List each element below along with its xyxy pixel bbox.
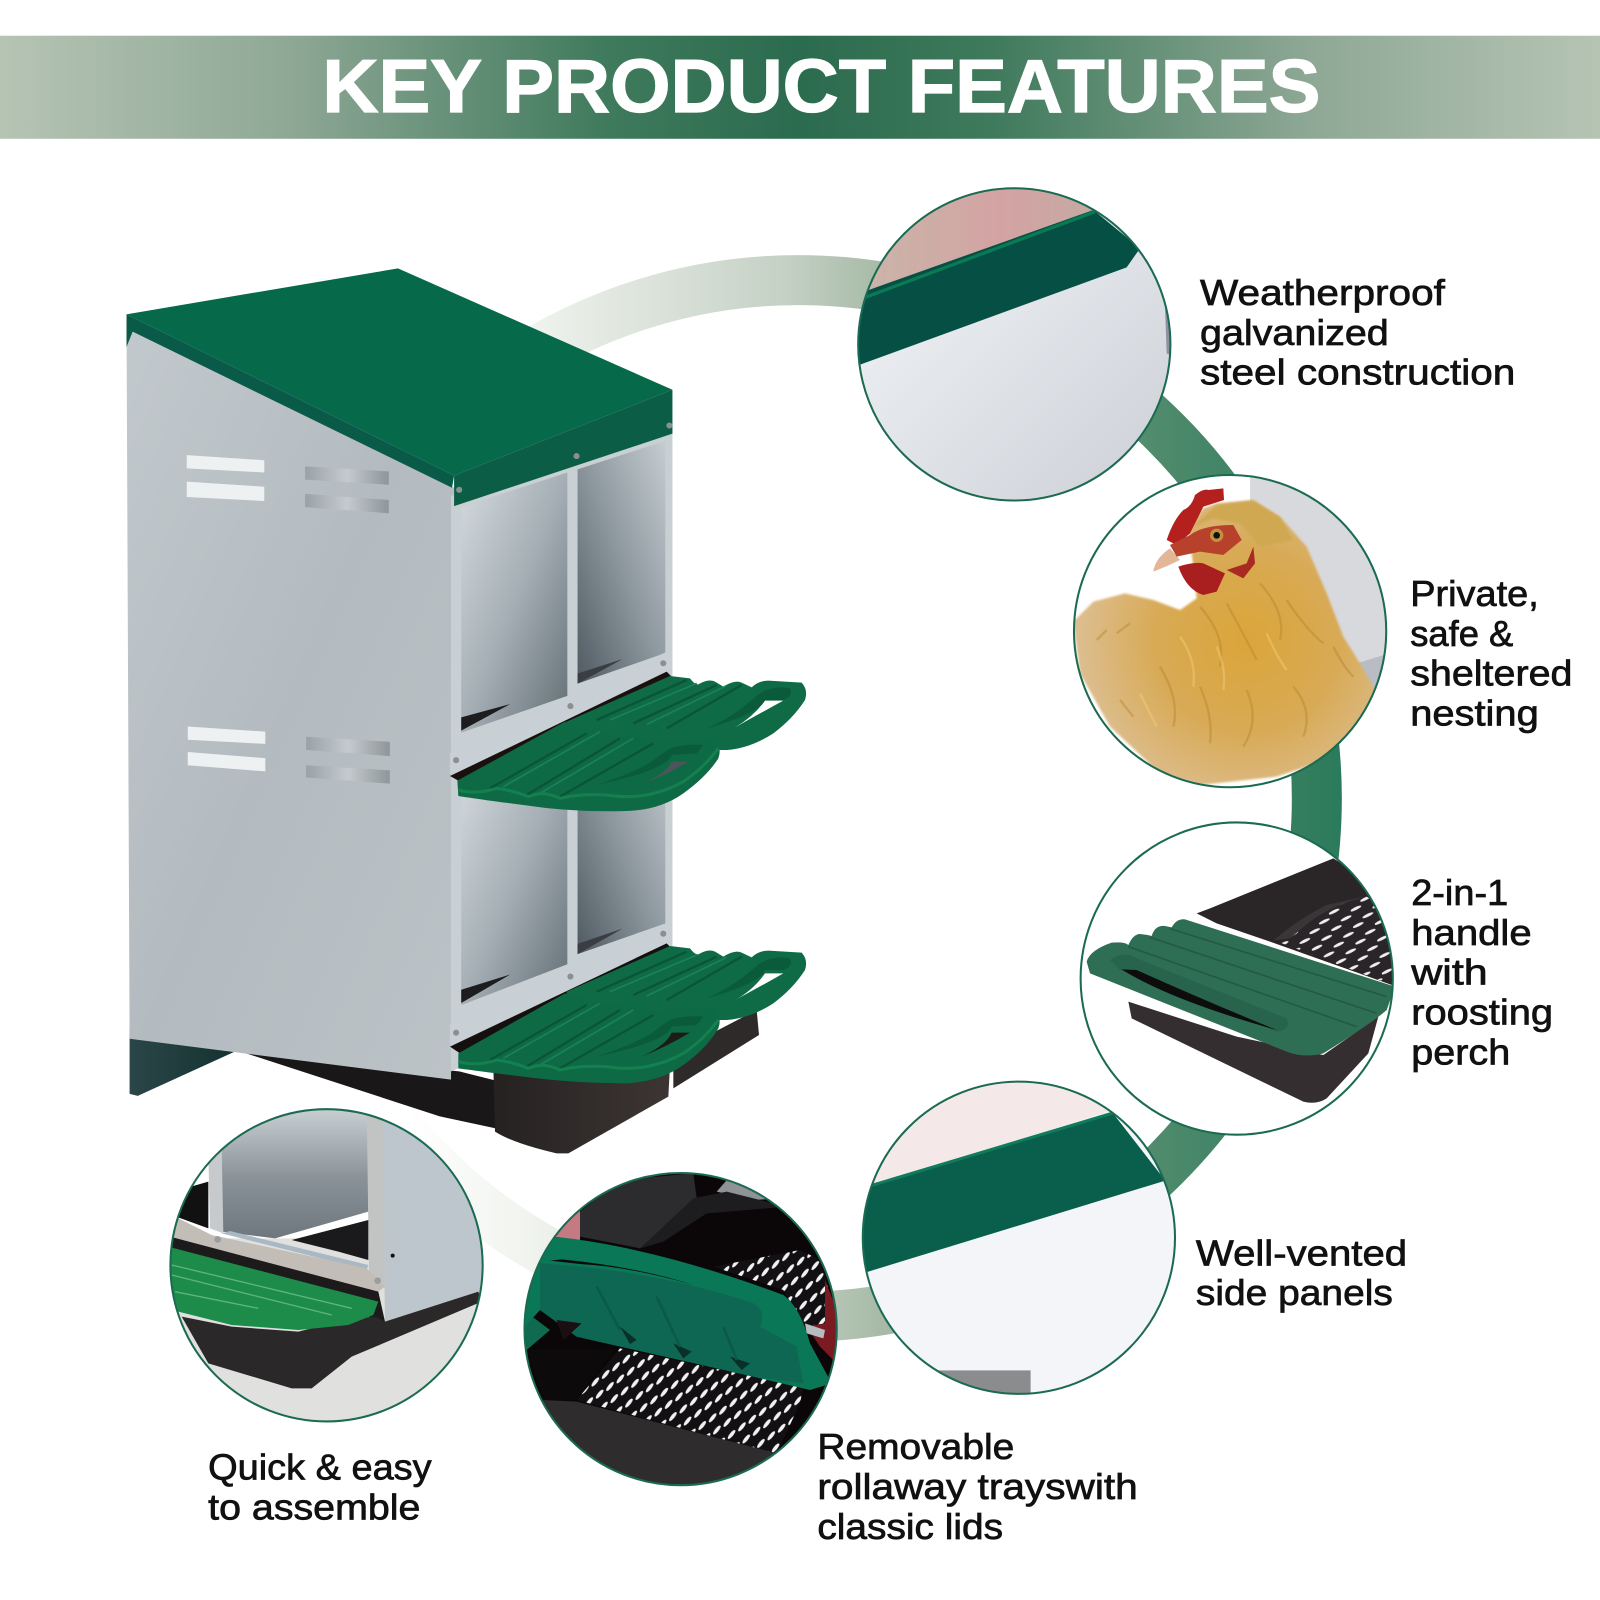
dark foot bbox=[130, 1026, 245, 1096]
photo circle: assembly bbox=[165, 1105, 498, 1426]
tray floor bbox=[233, 1049, 500, 1129]
label: weatherproof: galvanized bbox=[1200, 313, 1389, 353]
label: weatherproof bbox=[1200, 273, 1515, 393]
label: weatherproof: Weatherproof bbox=[1200, 273, 1445, 313]
nest compartments bbox=[450, 423, 672, 1071]
photo circle: handle with perch bbox=[1080, 822, 1397, 1139]
product: nesting box bbox=[127, 268, 806, 1153]
vent slots bbox=[187, 455, 390, 784]
lower tier trays and lids bbox=[450, 943, 806, 1153]
label: handle bbox=[1410, 873, 1553, 1072]
label: vented: Well-vented bbox=[1196, 1233, 1407, 1273]
label: handle: perch bbox=[1411, 1032, 1510, 1072]
upper tier lids bbox=[450, 672, 806, 811]
label: weatherproof: steel construction bbox=[1200, 353, 1515, 393]
header banner bbox=[0, 36, 1600, 139]
label: nesting: nesting bbox=[1410, 694, 1539, 734]
photo circle: vented side panel bbox=[862, 1082, 1179, 1398]
label: handle: roosting bbox=[1411, 992, 1553, 1032]
label: assembly: Quick & easy bbox=[208, 1448, 432, 1488]
label: assembly bbox=[208, 1448, 432, 1527]
connecting ring bbox=[280, 280, 1317, 1317]
label: removable trays: rollaway trayswith bbox=[817, 1467, 1138, 1507]
side panel bbox=[127, 324, 454, 1080]
label: nesting: safe & bbox=[1410, 614, 1513, 654]
photo circle: removable tray bbox=[515, 1163, 847, 1495]
label: assembly: to assemble bbox=[208, 1487, 420, 1527]
label: nesting: sheltered bbox=[1410, 654, 1572, 694]
label: handle: handle bbox=[1411, 913, 1532, 953]
label: nesting: Private, bbox=[1410, 574, 1539, 614]
label: vented: side panels bbox=[1196, 1273, 1393, 1313]
photo circle: galvanized steel bbox=[857, 187, 1172, 502]
label: nesting bbox=[1410, 574, 1572, 734]
sloped roof bbox=[127, 268, 672, 506]
label: removable trays: classic lids bbox=[817, 1507, 1003, 1547]
photo circle: hen bbox=[1073, 474, 1390, 791]
label: removable trays bbox=[817, 1427, 1138, 1547]
label: handle: 2-in-1 bbox=[1411, 873, 1508, 913]
label: handle: with bbox=[1410, 953, 1488, 993]
label: vented bbox=[1196, 1233, 1407, 1313]
label: removable trays: Removable bbox=[817, 1427, 1014, 1467]
title: KEY PRODUCT FEATURES bbox=[322, 45, 1320, 129]
